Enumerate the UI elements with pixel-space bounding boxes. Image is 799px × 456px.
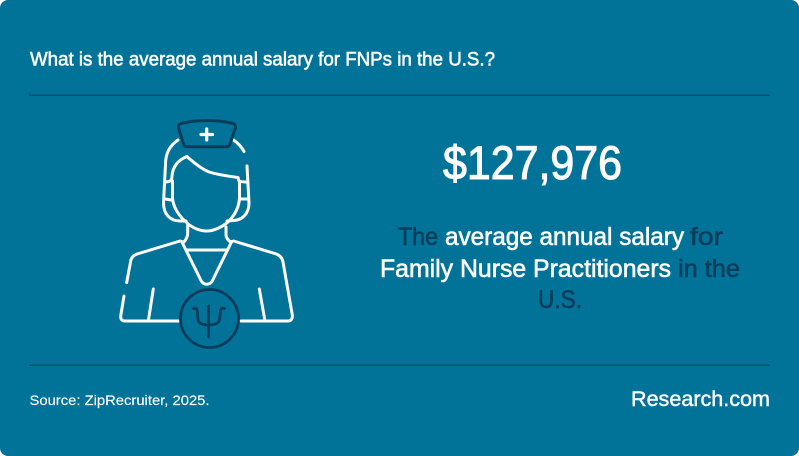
icon: nurse cap <box>178 120 236 147</box>
title: What is the average annual salary for FNPs in the U.S.? <box>30 48 495 70</box>
description text: Family Nurse Practitioners <box>380 255 671 283</box>
description text: U.S. <box>538 286 582 314</box>
icon: psychiatry psi badge <box>180 290 238 348</box>
scrub collar <box>182 242 232 284</box>
source note: Source: ZipRecruiter, 2025. <box>30 392 210 408</box>
hair outline <box>164 140 249 221</box>
description text: average annual salary <box>445 223 684 251</box>
description text: The <box>398 223 438 251</box>
description text <box>380 223 740 314</box>
face and fringe <box>165 156 248 231</box>
description text: in the <box>678 255 740 283</box>
salary figure: $127,976 <box>443 136 622 189</box>
neck <box>183 224 231 243</box>
description text: for <box>690 223 723 251</box>
icon: nurse <box>121 140 292 321</box>
shoulders and arms <box>121 241 292 321</box>
logo: Research.com: Research.com <box>631 387 770 411</box>
